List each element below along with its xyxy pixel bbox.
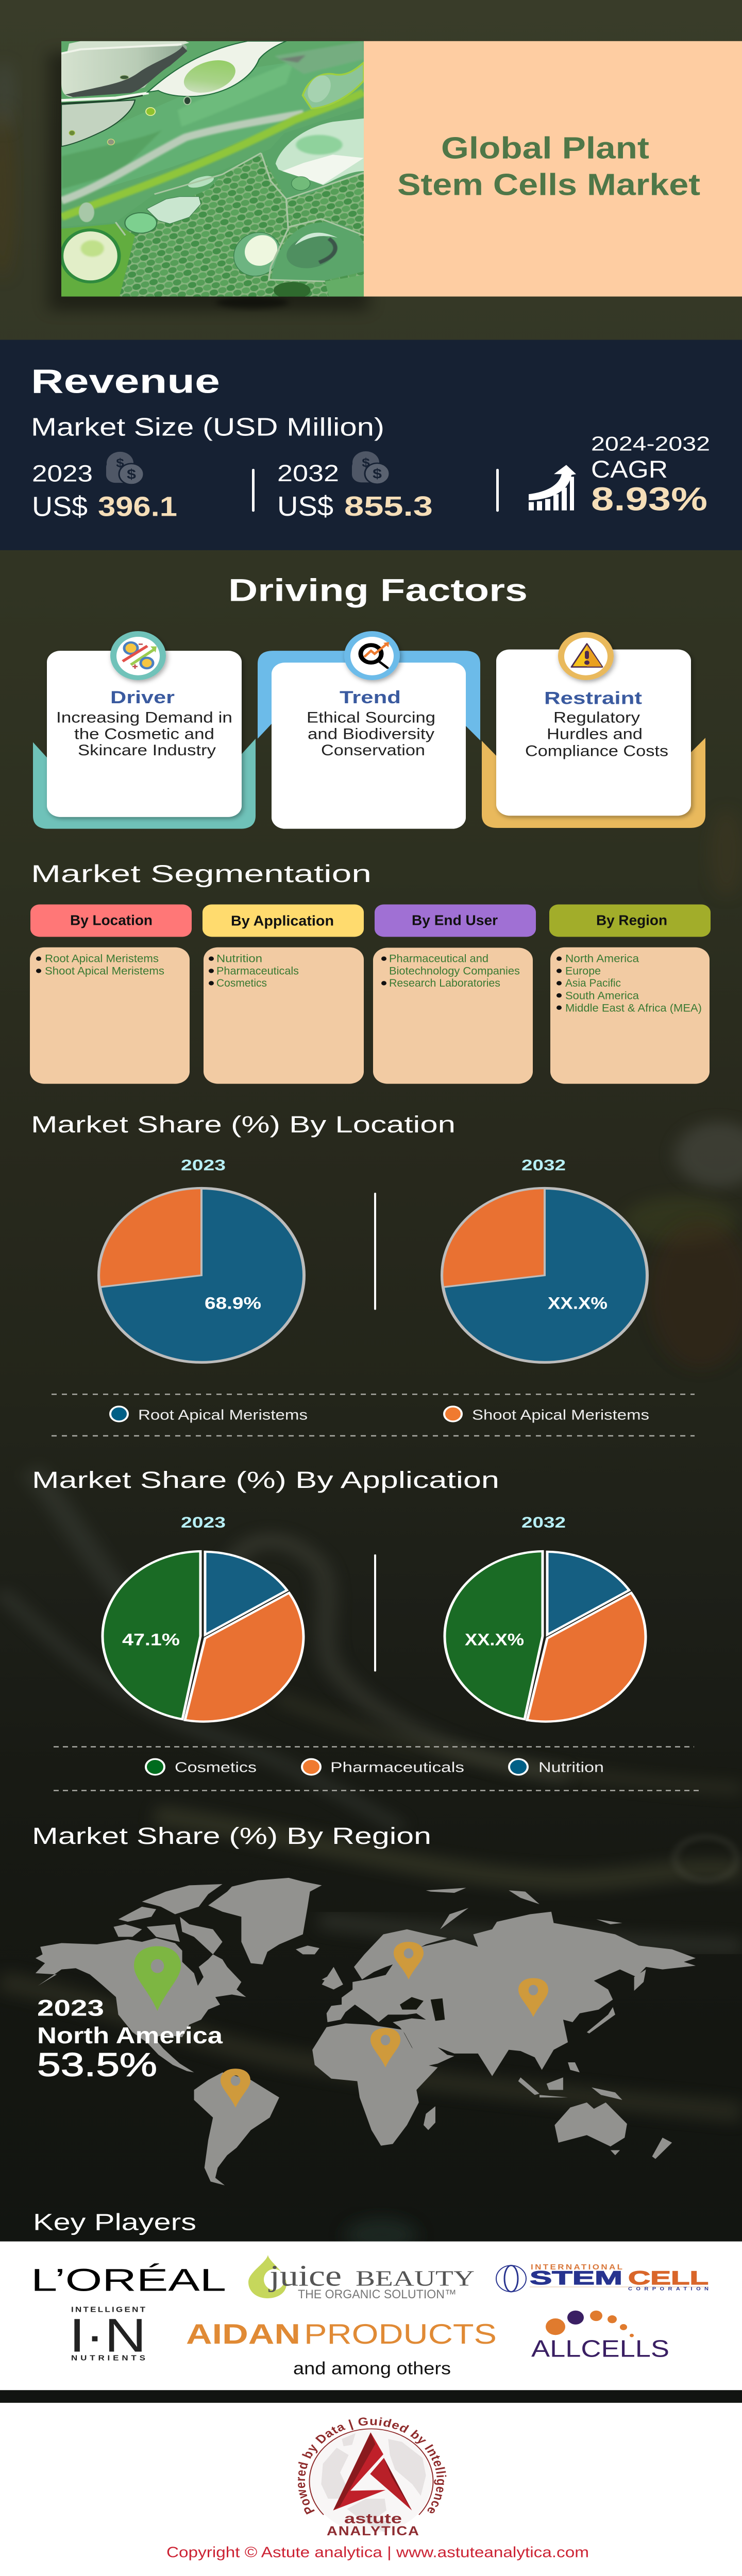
panel: segment by region: Europe — [565, 964, 601, 977]
panel: segment by region: North America — [565, 952, 639, 964]
icon: coins 2032: $ — [373, 466, 382, 482]
icon: driver badge — [110, 631, 166, 680]
panel: key players logos — [0, 2242, 742, 2390]
chart: application pie 2023: 2023 — [181, 1514, 226, 1531]
logo: Aidan Products — [186, 2318, 497, 2350]
chart: application pie 2032: 2032 — [521, 1514, 566, 1531]
map: iceland — [296, 1945, 319, 1954]
icon: coins 2032: $ — [362, 455, 370, 469]
title text: Global Plant — [441, 130, 649, 165]
text: and among others: and among others — [293, 2359, 451, 2378]
restraint text: Regulatory — [553, 709, 640, 726]
panel: segment by application: Pharmaceuticals — [216, 964, 299, 977]
panel: segment by location: By Location — [70, 912, 153, 928]
stat: 2023 revenue: 396.1 — [98, 492, 177, 522]
logo: L'Oreal: L’ORÉAL — [31, 2263, 226, 2298]
callout: North America share — [37, 1995, 223, 2083]
icon: growth arrow — [529, 465, 576, 511]
restraint text: Restraint — [544, 688, 642, 708]
panel: segment by end user: Research Laboratories — [389, 977, 500, 989]
map: madagascar — [424, 2106, 435, 2130]
chart: application pie 2023 — [103, 1514, 303, 1722]
panel: segment by region: Asia Pacific — [565, 977, 621, 989]
logo: Juice Beauty: THE ORGANIC SOLUTION™ — [298, 2287, 457, 2301]
chart: location pie 2032: 2032 — [521, 1157, 566, 1174]
logo: Aidan Products: AIDAN — [186, 2318, 300, 2350]
chart: application pie 2023: 47.1% — [122, 1631, 180, 1649]
heading: Revenue: Revenue — [31, 363, 220, 400]
trend text: Conservation — [321, 742, 425, 758]
title text — [397, 130, 700, 201]
subheading: market size: Market Size (USD Million) — [31, 413, 384, 441]
panel: revenue — [0, 340, 742, 550]
panel: segment by location: Root Apical Meristems — [45, 952, 159, 964]
map: south america — [194, 2072, 279, 2185]
map: north america — [36, 1938, 246, 2072]
icon: gold pin Europe — [394, 1942, 424, 1979]
driver text: Driver — [110, 687, 175, 707]
logo: Juice Beauty: juice — [268, 2259, 342, 2292]
chart: location pie 2023 — [99, 1157, 304, 1362]
stat: CAGR — [591, 433, 710, 517]
legend: application: Pharmaceuticals — [330, 1759, 464, 1775]
panel: header — [61, 41, 742, 299]
icon: restraint badge — [558, 632, 614, 680]
title text: Stem Cells Market — [397, 167, 700, 201]
icon: coins 2032 — [352, 451, 390, 484]
heading: market share by application: Market Share (%) By Application — [32, 1467, 499, 1493]
logo: International Stem Cell: CELL — [628, 2267, 709, 2289]
icon: trend badge — [344, 631, 400, 680]
title background panel — [364, 41, 742, 297]
logo: AllCells — [531, 2311, 669, 2362]
logo: Juice Beauty — [248, 2255, 475, 2301]
icon: green pin North America — [134, 1946, 181, 2011]
heading: Market Segmentation: Market Segmentation — [31, 860, 372, 888]
restraint text: Hurdles and — [547, 725, 643, 742]
logo: Astute Analytica: ANALYTICA — [327, 2524, 419, 2538]
logo: Intelligent Nutrients: NUTRIENTS — [71, 2354, 145, 2362]
legend: application: Cosmetics — [175, 1759, 257, 1775]
driver text: Skincare Industry — [78, 742, 216, 758]
chart: world map — [36, 1878, 696, 2185]
map: africa — [312, 2023, 438, 2146]
panel: segment by application: Nutrition — [216, 952, 262, 964]
trend text: Trend — [340, 687, 401, 707]
stat: 2032 revenue: 2032 — [277, 460, 339, 486]
stat: 2023 revenue: 2023 — [32, 460, 93, 487]
chart: location pie 2032 — [442, 1157, 647, 1362]
panel: segment by region: South America — [565, 990, 639, 1002]
logo: Astute Analytica: astute — [344, 2511, 402, 2527]
logo: Aidan Products: PRODUCTS — [304, 2318, 497, 2350]
stat: CAGR: 2024-2032 — [591, 433, 710, 455]
stat: 2023 revenue — [32, 460, 177, 522]
trend text: and Biodiversity — [308, 725, 435, 742]
logo: International Stem Cell: STEM — [530, 2267, 622, 2289]
panel: segment by region: By Region — [596, 912, 667, 928]
icon: coins 2023: $ — [116, 456, 124, 470]
panel: segment by application: By Application — [231, 913, 334, 929]
trend text: Ethical Sourcing — [307, 709, 435, 726]
driver text: Increasing Demand in — [56, 709, 232, 726]
panel: segment by location: Shoot Apical Meristems — [45, 964, 164, 977]
map: greenland — [208, 1878, 322, 1964]
chart: location pie 2023: 68.9% — [205, 1294, 261, 1313]
map: arctic islands — [113, 1884, 223, 1954]
panel: segment by region: Middle East & Africa (MEA) — [565, 1002, 702, 1014]
logo: Intelligent Nutrients: I·N — [69, 2309, 146, 2362]
callout: North America share: North America — [37, 2023, 223, 2048]
stat: CAGR: 8.93% — [591, 481, 707, 517]
heading: market share by location: Market Share (%) By Location — [31, 1111, 456, 1138]
driver text: the Cosmetic and — [74, 725, 214, 742]
map: inland seas — [400, 1997, 445, 2021]
icon: coins 2023: $ — [127, 467, 136, 482]
icon: coins 2023 — [106, 452, 144, 485]
chart: application pie 2032 — [445, 1514, 646, 1722]
icon: gold pin South America — [221, 2069, 250, 2108]
logo: Astute Analytica: Powered by Data | Guided by Intelligence — [298, 2417, 446, 2515]
logo: AllCells: ALLCELLS — [531, 2335, 669, 2362]
callout: North America share: 2023 — [37, 1995, 104, 2021]
chart: location pie 2023: 2023 — [181, 1157, 226, 1174]
text: copyright: Copyright © Astute analytica | www.astuteanalytica.com — [166, 2544, 589, 2561]
icon: gold pin Asia — [518, 1978, 548, 2017]
callout: North America share: 53.5% — [37, 2046, 157, 2083]
panel: segment by end user: Biotechnology Companies — [389, 964, 520, 977]
map: asia pacific islands — [322, 1888, 672, 2159]
logo: Intelligent Nutrients: INTELLIGENT — [71, 2306, 145, 2314]
map: eurasia — [327, 1912, 696, 2076]
panel: footer — [0, 2403, 742, 2576]
header photo: green fluid art — [61, 41, 364, 299]
legend: application: Nutrition — [538, 1759, 604, 1775]
legend: location: Shoot Apical Meristems — [472, 1407, 649, 1423]
restraint text — [525, 688, 668, 759]
panel: segment by end user: Pharmaceutical and — [389, 952, 488, 964]
panel: segment by region — [549, 905, 711, 1084]
legend: application — [146, 1759, 604, 1775]
logo: International Stem Cell: INTERNATIONAL — [531, 2263, 622, 2272]
stat: 2023 revenue: US$ — [32, 492, 88, 522]
stat: 2032 revenue — [277, 460, 433, 522]
restraint text: Compliance Costs — [525, 742, 668, 759]
stat: CAGR: CAGR — [591, 456, 668, 483]
panel: driver card — [33, 631, 256, 829]
stat: 2032 revenue: US$ — [277, 491, 333, 522]
chart: location pie 2032: XX.X% — [548, 1294, 608, 1313]
legend: location: Root Apical Meristems — [138, 1407, 308, 1423]
logo: International Stem Cell — [496, 2263, 709, 2292]
legend: location — [110, 1406, 649, 1423]
logo: International Stem Cell: CORPORATION — [628, 2286, 709, 2292]
panel: trend card — [258, 631, 480, 829]
heading: market share by region: Market Share (%) By Region — [32, 1823, 431, 1849]
driver text — [56, 687, 232, 758]
chart: application pie 2032: XX.X% — [465, 1631, 524, 1649]
icon: gold pin Africa — [370, 2028, 400, 2067]
panel: restraint card — [482, 632, 705, 828]
stat: 2032 revenue: 855.3 — [344, 491, 433, 522]
logo: Juice Beauty: BEAUTY — [356, 2267, 475, 2291]
panel: segment by end user: By End User — [412, 912, 498, 928]
panel: segment by application: Cosmetics — [216, 977, 267, 989]
heading: Driving Factors: Driving Factors — [228, 573, 528, 608]
heading: Key Players: Key Players — [33, 2209, 196, 2235]
trend text — [307, 687, 435, 758]
panel: segment by application — [203, 905, 364, 1084]
panel: segment by location — [30, 905, 192, 1084]
panel: segment by end user — [373, 905, 536, 1084]
map: australia — [554, 2103, 627, 2146]
